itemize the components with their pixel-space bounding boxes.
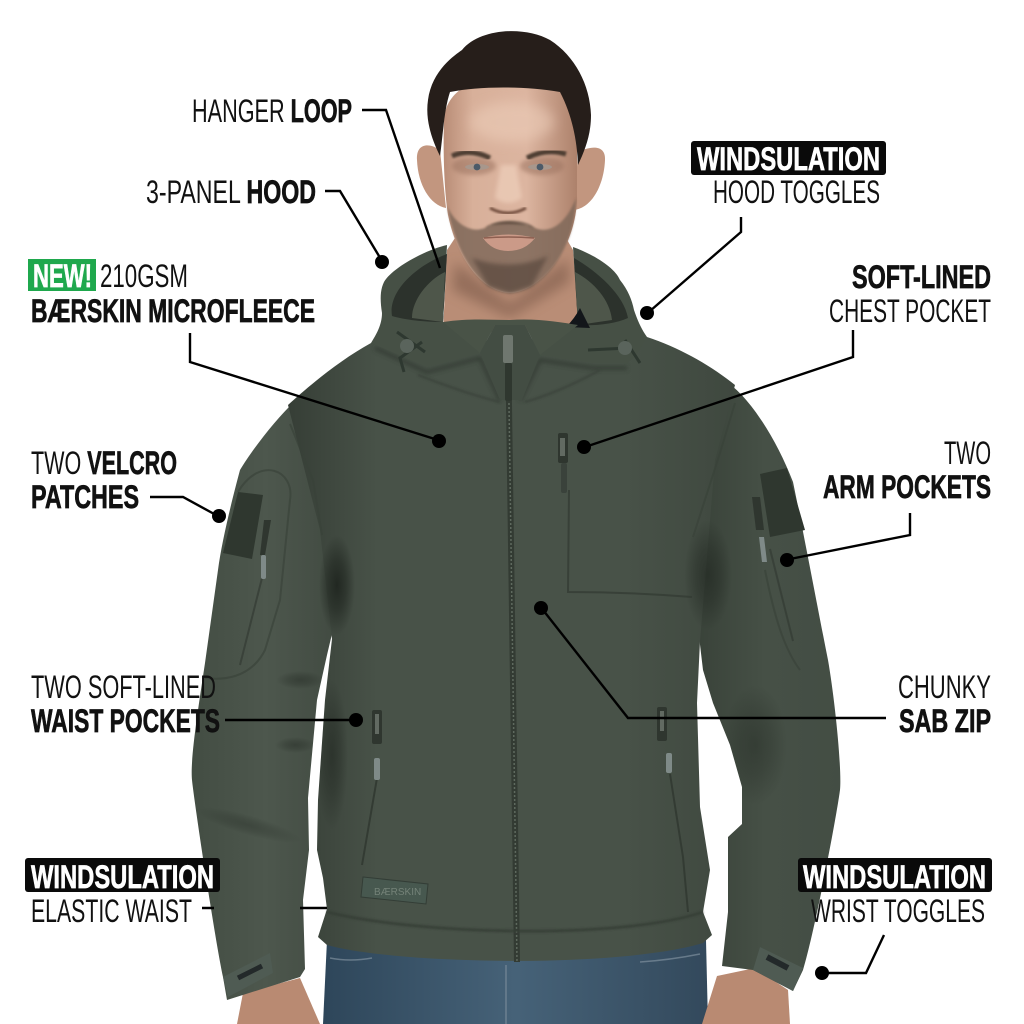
label: arm pockets: TWO <box>944 435 991 471</box>
label: velcro patches: PATCHES <box>31 479 139 515</box>
label: elastic waist: ELASTIC WAIST <box>31 893 192 929</box>
center zip <box>503 335 517 962</box>
label: new microfleece: NEW! <box>33 258 92 294</box>
label: hood toggles <box>640 141 886 320</box>
label: arm pockets <box>780 435 991 567</box>
jeans <box>323 940 708 1024</box>
label: chest pocket <box>577 259 991 454</box>
label: new microfleece: BÆRSKIN MICROFLEECE <box>31 293 315 329</box>
ears <box>417 145 605 210</box>
wrist cuffs <box>223 947 803 997</box>
left sleeve <box>192 400 340 1000</box>
label: waist pockets: WAIST POCKETS <box>31 703 220 739</box>
collar seam <box>418 370 600 402</box>
label: hood toggles: HOOD TOGGLES <box>713 174 880 210</box>
logo patch: BÆRSKIN <box>374 887 421 898</box>
label: waist pockets: TWO SOFT-LINED <box>31 669 216 705</box>
chest pocket <box>558 433 692 597</box>
neck <box>443 238 580 332</box>
hands <box>237 968 790 1024</box>
velcro patches <box>223 468 805 559</box>
label: new microfleece: 210GSM <box>100 258 188 294</box>
label: velcro patches <box>31 445 226 523</box>
beard stubble <box>447 198 576 293</box>
center placket <box>480 325 540 400</box>
face <box>444 75 577 293</box>
eyes <box>452 152 566 170</box>
eye socket shadows <box>452 157 564 175</box>
label: velcro patches: TWO VELCRO <box>31 445 177 481</box>
person and jacket photo illustration <box>192 31 840 1024</box>
fold shadows <box>192 520 787 850</box>
hood flap shadow <box>375 348 627 400</box>
nose <box>490 165 526 213</box>
hood inner dark <box>392 254 628 325</box>
label: wrist toggles <box>798 858 992 980</box>
label: hanger loop: HANGER LOOP <box>192 93 352 129</box>
moustache <box>478 222 540 232</box>
hood outer <box>371 245 647 367</box>
shoulder and armhole seams <box>205 403 800 679</box>
label: new microfleece <box>28 258 446 448</box>
label: 3-panel hood <box>146 174 389 269</box>
hood lining <box>412 272 612 325</box>
undershirt <box>566 308 590 328</box>
label: sab zip: SAB ZIP <box>899 703 991 739</box>
hem band <box>327 912 703 931</box>
arm pockets <box>240 497 793 665</box>
mouth <box>483 234 535 251</box>
torso <box>288 337 735 961</box>
chin beard <box>472 256 548 293</box>
label: sab zip <box>534 601 991 739</box>
collar band <box>443 319 578 355</box>
forehead highlight <box>470 102 554 142</box>
label: waist pockets <box>31 669 363 739</box>
label: hood toggles: WINDSULATION <box>697 141 880 177</box>
hair <box>427 31 591 165</box>
label: elastic waist: WINDSULATION <box>31 859 214 895</box>
hood toggles <box>397 332 640 372</box>
right sleeve <box>690 378 840 991</box>
neck shadow <box>452 258 570 318</box>
waist pockets <box>362 707 688 912</box>
label: 3-panel hood: 3-PANEL HOOD <box>146 174 316 210</box>
label: elastic waist <box>25 858 327 929</box>
logo patch <box>361 877 428 904</box>
label: hanger loop <box>192 93 440 268</box>
